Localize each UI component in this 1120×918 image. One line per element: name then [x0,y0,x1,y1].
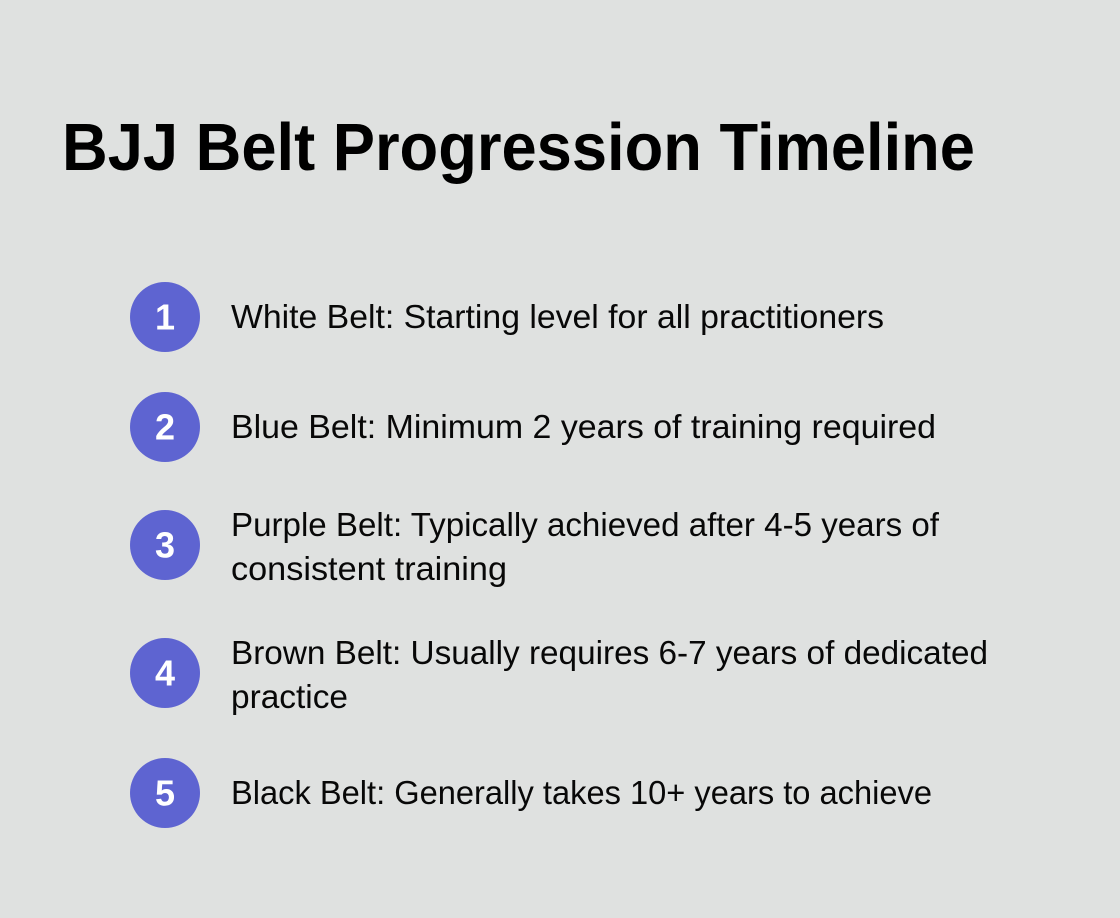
title: BJJ Belt Progression Timeline [62,110,975,185]
number badge 3 [130,510,200,580]
step 4 text: practice [231,679,348,716]
number badge 1: 1 [155,296,175,338]
step 2 text: Blue Belt: Minimum 2 years of training required [231,409,936,446]
number badge 5: 5 [155,772,175,814]
number badge 5 [130,758,200,828]
number badge 4: 4 [155,652,175,694]
step 5: black belt [130,758,932,828]
step 1: white belt [130,282,884,352]
step 4 text: Brown Belt: Usually requires 6-7 years of dedicated [231,635,988,672]
step 3 text: Purple Belt: Typically achieved after 4-5 years of [231,507,940,544]
step 2: blue belt [130,392,936,462]
number badge 3: 3 [155,524,175,566]
step 1 text: White Belt: Starting level for all practitioners [231,299,884,336]
step 3 text [231,507,940,588]
step 4: brown belt [130,635,988,716]
step 4 text [231,635,988,716]
number badge 2: 2 [155,406,175,448]
number badge 1 [130,282,200,352]
step 3: purple belt [130,507,940,588]
number badge 4 [130,638,200,708]
step 5 text: Black Belt: Generally takes 10+ years to achieve [231,775,932,812]
step 3 text: consistent training [231,551,507,588]
number badge 2 [130,392,200,462]
